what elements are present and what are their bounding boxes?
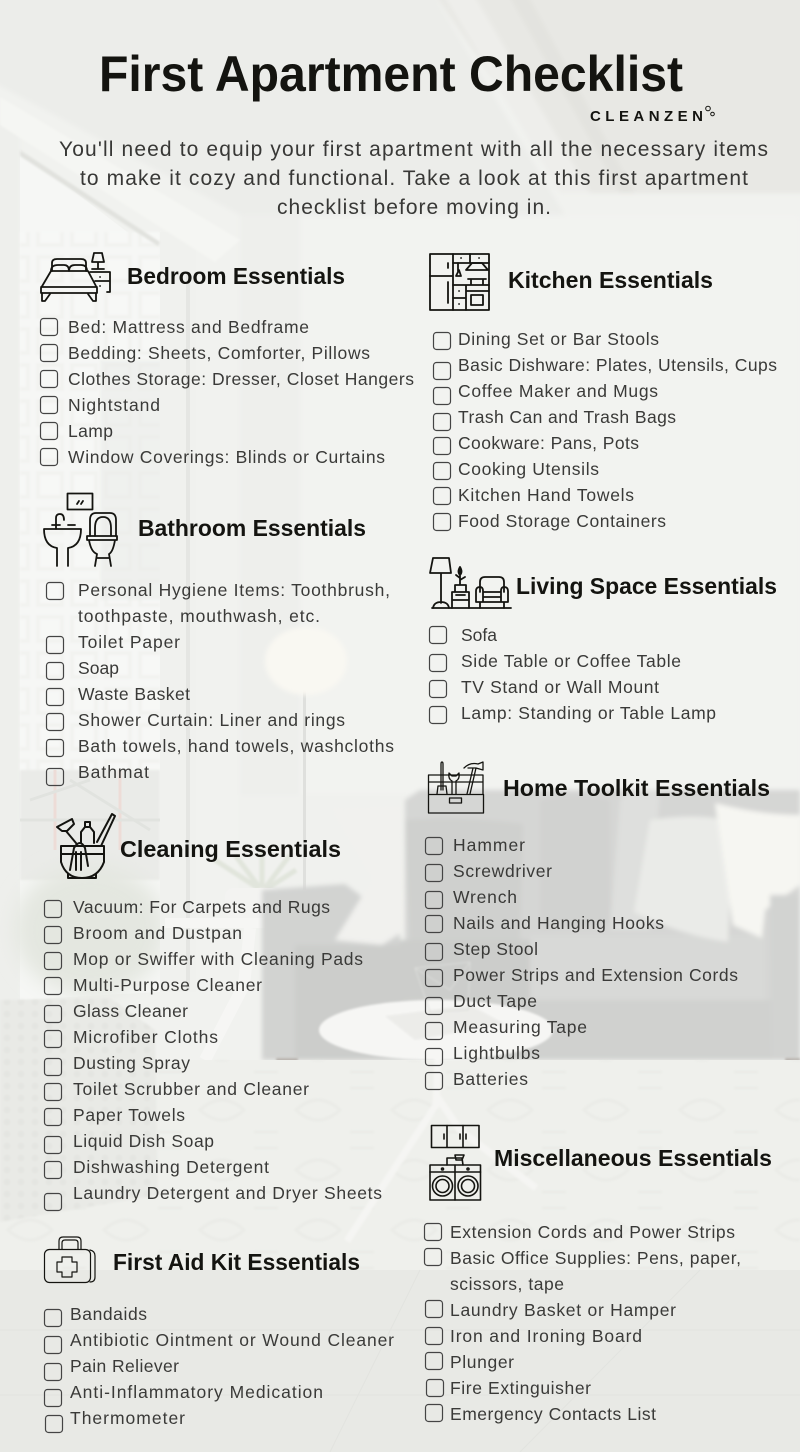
icon: cleaning bucket [57, 814, 115, 878]
checklist: Duct Tape [453, 991, 537, 1011]
checklist: Food Storage Containers [458, 511, 666, 531]
checklist: Cookware: Pans, Pots [458, 433, 639, 453]
checklist: Broom and Dustpan [73, 923, 242, 943]
icon: first aid kit [44, 1237, 95, 1282]
checklist: Cooking Utensils [458, 459, 599, 479]
checklist: Screwdriver [453, 861, 552, 881]
checklist: Lamp: Standing or Table Lamp [461, 703, 716, 723]
checklist: Window Coverings: Blinds or Curtains [68, 447, 385, 467]
checklist: Bathmat [78, 762, 149, 782]
sofa legs [276, 1058, 298, 1102]
logo: Cleanzen: CLEANZEN [590, 108, 703, 125]
checklist: Bath towels, hand towels, washcloths [78, 736, 394, 756]
heading: First Aid Kit Essentials [113, 1249, 360, 1275]
checklist: Kitchen Hand Towels [458, 485, 634, 505]
checklist: Clothes Storage: Dresser, Closet Hangers [68, 369, 414, 389]
heading: Bathroom Essentials [138, 515, 366, 541]
checklist: Extension Cords and Power Strips [450, 1222, 735, 1242]
checklist: Toilet Scrubber and Cleaner [73, 1079, 309, 1099]
checklist: Measuring Tape [453, 1017, 587, 1037]
floor [0, 1270, 800, 1452]
checklist: Plunger [450, 1352, 514, 1372]
checklist: Batteries [453, 1069, 528, 1089]
checklist [40, 317, 414, 467]
checklist: Laundry Detergent and Dryer Sheets [73, 1183, 382, 1203]
checklist: Sofa [461, 625, 497, 645]
checklist: Multi-Purpose Cleaner [73, 975, 262, 995]
sofa [262, 790, 800, 1060]
checklist: Power Strips and Extension Cords [453, 965, 738, 985]
checklist: Trash Can and Trash Bags [458, 407, 676, 427]
checklist: Vacuum: For Carpets and Rugs [73, 897, 330, 917]
floor lamp [265, 627, 347, 890]
checklist: Hammer [453, 835, 525, 855]
icon: sink and toilet [44, 494, 117, 566]
icon: bed and nightstand [41, 253, 110, 301]
checklist: Bandaids [70, 1304, 147, 1324]
checklist: Side Table or Coffee Table [461, 651, 681, 671]
checklist: Waste Basket [78, 684, 190, 704]
heading: Miscellaneous Essentials [494, 1145, 772, 1171]
panel: kitchen essentials [430, 254, 777, 531]
checklist: Glass Cleaner [73, 1001, 188, 1021]
intro paragraph: You'll need to equip your first apartment with all the necessary items [59, 138, 768, 161]
checklist: Laundry Basket or Hamper [450, 1300, 676, 1320]
heading: Bedroom Essentials [127, 263, 345, 289]
panel: living space essentials [430, 558, 777, 724]
checklist: TV Stand or Wall Mount [461, 677, 659, 697]
icon: lamp, plant and armchair [430, 558, 511, 608]
checklist: Paper Towels [73, 1105, 185, 1125]
icon: cabinet and washer-dryer [430, 1126, 480, 1200]
checklist: Bedding: Sheets, Comforter, Pillows [68, 343, 370, 363]
checklist [434, 329, 777, 531]
heading: Home Toolkit Essentials [503, 775, 770, 801]
intro paragraph: checklist before moving in. [277, 196, 551, 219]
checklist: Liquid Dish Soap [73, 1131, 214, 1151]
checklist: Dining Set or Bar Stools [458, 329, 659, 349]
panel: miscellaneous essentials [424, 1126, 772, 1424]
checklist: Nightstand [68, 395, 160, 415]
checklist: Step Stool [453, 939, 538, 959]
checklist [430, 625, 716, 724]
checklist: Basic Dishware: Plates, Utensils, Cups [458, 355, 777, 375]
checklist: Antibiotic Ointment or Wound Cleaner [70, 1330, 394, 1350]
checklist: Fire Extinguisher [450, 1378, 591, 1398]
heading: Cleaning Essentials [120, 836, 341, 862]
round side table [319, 962, 553, 1241]
checklist: Pain Reliever [70, 1356, 179, 1376]
checklist [424, 1222, 741, 1424]
heading: Kitchen Essentials [508, 267, 713, 293]
checklist: Personal Hygiene Items: Toothbrush, [78, 580, 390, 600]
checklist: Anti-Inflammatory Medication [70, 1382, 323, 1402]
checklist: Dishwashing Detergent [73, 1157, 269, 1177]
checklist: Shower Curtain: Liner and rings [78, 710, 345, 730]
window [0, 97, 240, 1000]
checklist: Toilet Paper [78, 632, 180, 652]
rug [0, 1060, 800, 1270]
checklist: Thermometer [70, 1408, 185, 1428]
title: First Apartment Checklist [99, 46, 683, 102]
panel: home toolkit essentials [426, 762, 770, 1090]
icon: toolbox [428, 762, 484, 813]
checklist [44, 1304, 394, 1432]
checklist: Nails and Hanging Hooks [453, 913, 664, 933]
checklist: scissors, tape [450, 1274, 564, 1294]
checklist [46, 580, 394, 786]
intro paragraph [59, 138, 768, 219]
panel: bathroom essentials [44, 494, 394, 786]
plant and side table [165, 850, 296, 1060]
checklist: Lamp [68, 421, 113, 441]
checklist: Lightbulbs [453, 1043, 540, 1063]
pouf [0, 998, 158, 1222]
checklist: Mop or Swiffer with Cleaning Pads [73, 949, 363, 969]
heading: Living Space Essentials [516, 573, 777, 599]
checklist: Basic Office Supplies: Pens, paper, [450, 1248, 741, 1268]
checklist: Dusting Spray [73, 1053, 190, 1073]
checklist: Emergency Contacts List [450, 1404, 656, 1424]
icon: kitchen [430, 254, 489, 310]
panel: cleaning essentials [44, 814, 382, 1210]
intro paragraph: to make it cozy and functional. Take a look at this first apartment [80, 167, 748, 190]
checklist: Soap [78, 658, 119, 678]
checklist: Bed: Mattress and Bedframe [68, 317, 309, 337]
checklist: Iron and Ironing Board [450, 1326, 642, 1346]
checklist: Wrench [453, 887, 517, 907]
checklist [426, 835, 738, 1090]
panel: first aid kit essentials [44, 1237, 394, 1432]
checklist [44, 897, 382, 1210]
panel: bedroom essentials [40, 253, 414, 467]
checklist: Microfiber Cloths [73, 1027, 218, 1047]
checklist: toothpaste, mouthwash, etc. [78, 606, 320, 626]
checklist: Coffee Maker and Mugs [458, 381, 658, 401]
